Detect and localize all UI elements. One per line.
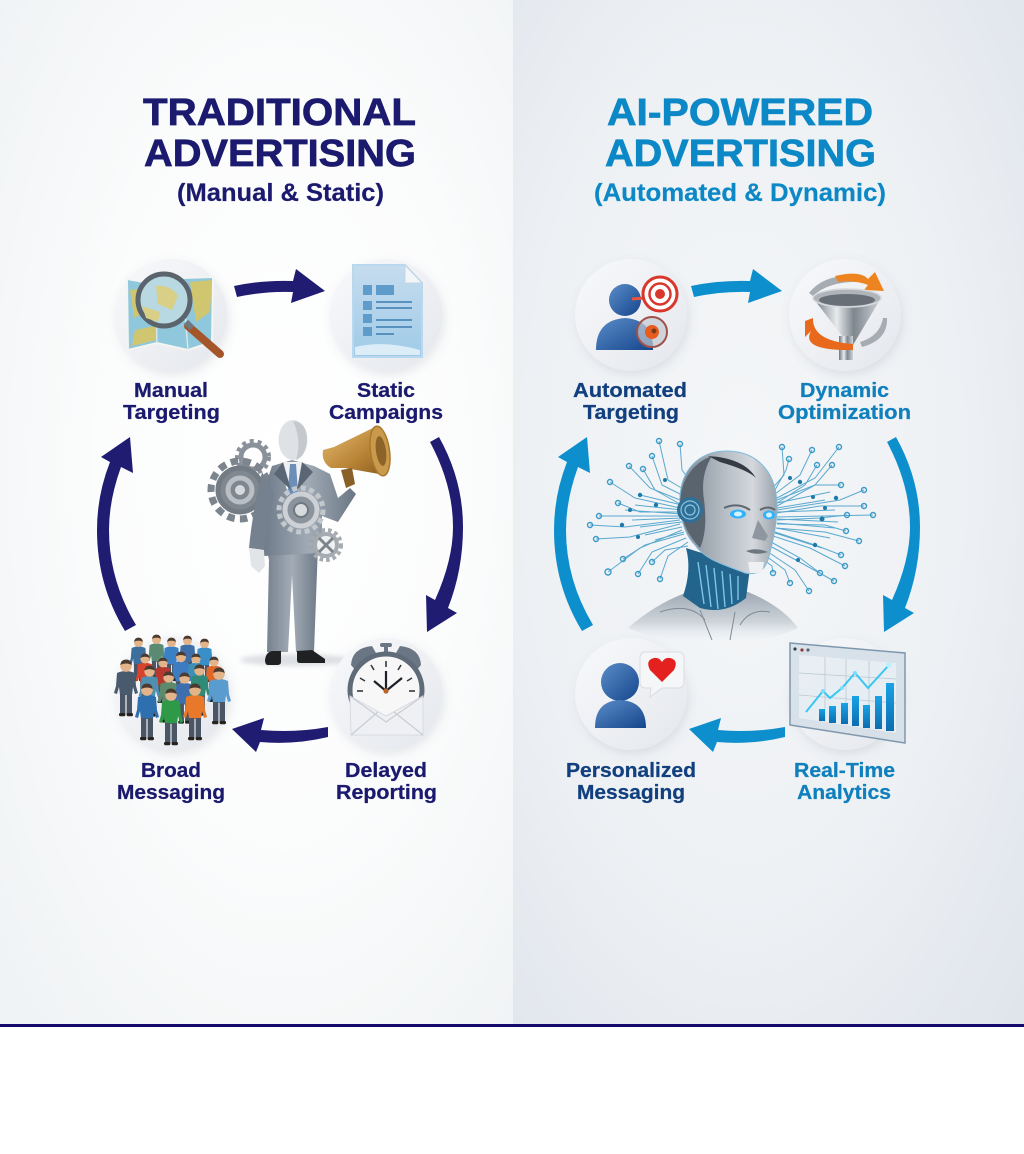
label: real-time analytics: Real-Time bbox=[794, 760, 895, 782]
icon: dynamic optimization funnel bbox=[789, 259, 901, 371]
label: personalized messaging: Personalized bbox=[566, 760, 696, 782]
heading: traditional advertising: ADVERTISING bbox=[144, 133, 416, 175]
label: manual targeting: Targeting bbox=[123, 402, 220, 424]
label: static campaigns: Static bbox=[357, 380, 415, 402]
label: delayed reporting: Reporting bbox=[336, 782, 437, 804]
label: dynamic optimization: Dynamic bbox=[800, 380, 889, 402]
label: static campaigns: Campaigns bbox=[329, 402, 443, 424]
icon: broad messaging crowd bbox=[114, 635, 231, 750]
icon: real-time analytics dashboard bbox=[789, 638, 905, 750]
robot shoulders bbox=[628, 592, 798, 642]
circuit traces bbox=[590, 441, 873, 591]
heading: traditional advertising: (Manual & Static) bbox=[177, 179, 384, 207]
label: dynamic optimization bbox=[778, 380, 911, 424]
arrow: automated to dynamic bbox=[691, 269, 782, 303]
icon: static campaigns frozen document bbox=[330, 259, 442, 371]
label: automated targeting: Targeting bbox=[583, 402, 679, 424]
heading: ai-powered advertising: (Automated & Dynamic) bbox=[594, 179, 886, 207]
panel: background right bbox=[513, 0, 1024, 1024]
label: broad messaging: Broad bbox=[141, 760, 201, 782]
circuit nodes bbox=[588, 438, 876, 594]
arrow: manual to static bbox=[234, 269, 325, 303]
label: real-time analytics: Analytics bbox=[797, 782, 891, 804]
icon: personalized messaging bbox=[575, 638, 687, 750]
bottom rule bbox=[0, 1024, 1024, 1027]
illustration: businessman with gears and megaphone bbox=[211, 420, 393, 666]
label: broad messaging: Messaging bbox=[117, 782, 225, 804]
arrow: static to delayed bbox=[426, 437, 463, 632]
label: manual targeting bbox=[123, 380, 220, 424]
heading: ai-powered advertising: ADVERTISING bbox=[605, 133, 876, 175]
icon: automated targeting bbox=[575, 259, 687, 371]
label: automated targeting: Automated bbox=[573, 380, 687, 402]
icon: manual targeting map and magnifier bbox=[115, 259, 227, 371]
arrow: dynamic to analytics bbox=[883, 437, 920, 632]
label: broad messaging bbox=[117, 760, 225, 804]
arrow: delayed to broad bbox=[232, 718, 328, 752]
label: delayed reporting: Delayed bbox=[345, 760, 427, 782]
label: static campaigns bbox=[329, 380, 443, 424]
panel: ai-powered advertising bbox=[554, 92, 920, 804]
label: manual targeting: Manual bbox=[134, 380, 208, 402]
label: real-time analytics bbox=[794, 760, 895, 804]
panel: traditional advertising bbox=[97, 92, 463, 804]
icon: delayed reporting clock and envelope bbox=[330, 638, 442, 750]
robot neck bbox=[683, 548, 750, 610]
label: delayed reporting bbox=[336, 760, 437, 804]
heading: ai-powered advertising: AI-POWERED bbox=[607, 92, 873, 134]
label: dynamic optimization: Optimization bbox=[778, 402, 911, 424]
heading: ai-powered advertising bbox=[594, 92, 886, 207]
arrow: personalized to automated bbox=[554, 437, 593, 631]
label: personalized messaging: Messaging bbox=[577, 782, 685, 804]
panel: background left bbox=[0, 0, 513, 1024]
robot head bbox=[680, 451, 777, 574]
label: automated targeting bbox=[573, 380, 687, 424]
heading: traditional advertising: TRADITIONAL bbox=[143, 92, 416, 134]
label: personalized messaging bbox=[566, 760, 696, 804]
illustration: ai robot head with circuit network bbox=[588, 438, 876, 642]
arrow: broad to manual bbox=[97, 437, 136, 631]
heading: traditional advertising bbox=[143, 92, 416, 207]
arrow: analytics to personalized bbox=[689, 718, 785, 752]
